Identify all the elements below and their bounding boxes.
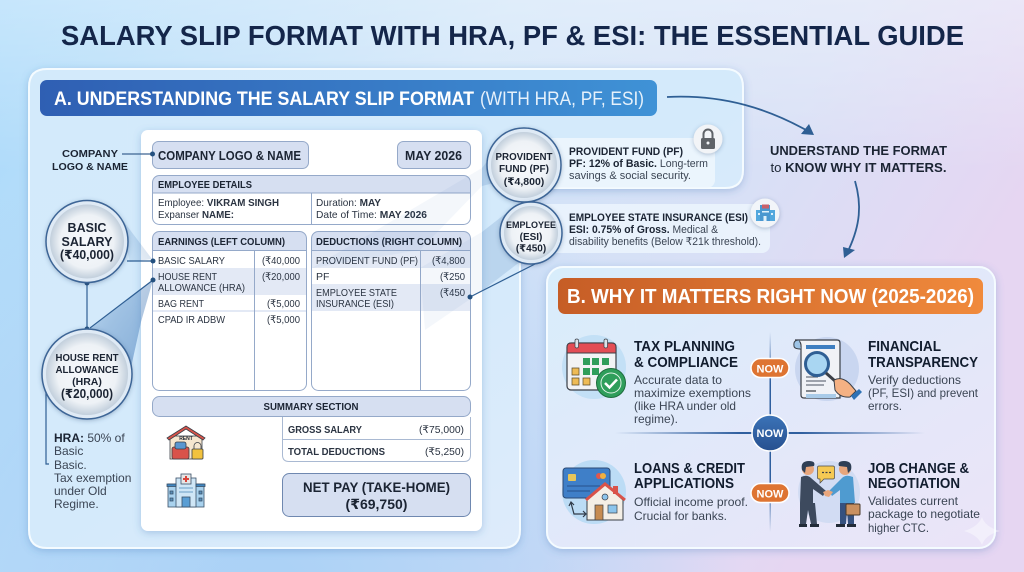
icon: credit card and house <box>562 460 626 524</box>
text: HRA note <box>54 431 131 511</box>
text: job change: Validates current <box>868 494 959 508</box>
callout: basic salary <box>46 200 128 282</box>
net pay box: (₹69,750) <box>346 496 407 512</box>
callout: basic salary: SALARY <box>62 235 113 249</box>
section A heading: (WITH HRA, PF, ESI) <box>480 89 644 110</box>
deductions table <box>312 232 470 390</box>
deductions table: (₹4,800 <box>432 255 465 267</box>
block: job change <box>798 460 980 535</box>
title: SALARY SLIP FORMAT WITH HRA, PF & ESI: THE ESSENTIAL GUIDE <box>61 20 964 51</box>
icon: lock <box>694 124 722 154</box>
company name box: COMPANY LOGO & NAME <box>158 148 301 163</box>
callout: basic salary: BASIC <box>68 221 106 235</box>
text: HRA note: Basic <box>54 444 83 458</box>
sparkle <box>964 517 1000 545</box>
label: company logo and name <box>52 148 155 173</box>
callout: employee ESI: (₹450) <box>516 244 546 254</box>
callout: house rent allowance <box>42 329 132 419</box>
callout: employee ESI: (ESI) <box>520 232 542 243</box>
deductions table: PF <box>316 271 329 283</box>
section B heading <box>558 278 983 314</box>
card: employee state insurance: EMPLOYEE STATE INSURANCE (ESI) <box>569 212 748 224</box>
callout: house rent allowance: (HRA) <box>72 376 102 388</box>
icon: ESI hospital <box>750 198 780 228</box>
employee details: Expanser NAME: <box>158 209 234 221</box>
icon: document with magnifier <box>794 337 862 401</box>
badge: now bottom: NOW <box>757 488 784 500</box>
block: financial transparency <box>794 337 979 413</box>
text: financial transparency: TRANSPARENCY <box>868 354 978 371</box>
divider lines <box>615 332 925 532</box>
summary section: (₹75,000) <box>419 424 464 436</box>
badge: now bottom <box>751 484 789 502</box>
earnings table: HOUSE RENT <box>158 271 217 283</box>
earnings table: (₹40,000 <box>262 255 300 267</box>
card: employee state insurance <box>535 204 770 253</box>
connectors from callouts <box>46 261 537 464</box>
summary section <box>152 396 470 462</box>
callout: house rent allowance: ALLOWANCE <box>56 364 118 376</box>
employee details: EMPLOYEE DETAILS <box>158 179 252 191</box>
net pay box <box>282 474 470 516</box>
text: tax planning: regime). <box>634 412 678 426</box>
callout: house rent allowance: HOUSE RENT <box>56 352 119 364</box>
text: loans and credit: Crucial for banks. <box>634 509 727 523</box>
deductions table: (₹450 <box>440 287 465 299</box>
text: understand the format: to KNOW WHY IT MATTERS. <box>770 160 946 175</box>
text: tax planning: TAX PLANNING <box>634 338 735 355</box>
section B heading: B. WHY IT MATTERS RIGHT NOW (2025-2026) <box>567 286 974 308</box>
company name box <box>152 142 308 168</box>
employee details: Employee: VIKRAM SINGH <box>158 197 279 209</box>
panel: section A background <box>29 69 743 548</box>
date box <box>398 142 470 168</box>
text: HRA note: Basic. <box>54 458 87 472</box>
deductions table: INSURANCE (ESI) <box>316 298 394 310</box>
text: loans and credit: APPLICATIONS <box>634 475 734 492</box>
left person <box>799 461 826 527</box>
summary section: (₹5,250) <box>425 446 464 458</box>
net pay box: NET PAY (TAKE-HOME) <box>303 479 450 495</box>
label: company logo and name: COMPANY <box>62 148 118 160</box>
callout: basic salary: (₹40,000) <box>60 248 114 262</box>
deductions table: (₹250 <box>440 271 465 283</box>
text: job change: JOB CHANGE & <box>868 460 969 477</box>
badge: now top <box>751 358 789 378</box>
earnings table: (₹5,000 <box>267 314 300 326</box>
callout: house rent allowance: (₹20,000) <box>61 387 113 401</box>
callout: employee ESI <box>500 202 562 264</box>
text: tax planning: (like HRA under old <box>634 399 736 413</box>
text: HRA note: under Old <box>54 484 107 498</box>
card: provident fund: PF: 12% of Basic. Long-term <box>569 158 708 170</box>
text: financial transparency <box>868 338 979 413</box>
badge: now top: NOW <box>757 364 784 376</box>
text: understand the format <box>770 143 947 175</box>
date box: MAY 2026 <box>405 148 462 163</box>
card: provident fund <box>530 138 715 188</box>
text: tax planning: Accurate data to <box>634 373 722 387</box>
earnings table: ALLOWANCE (HRA) <box>158 282 245 294</box>
deductions table: EMPLOYEE STATE <box>316 287 397 299</box>
section A heading <box>40 80 657 116</box>
earnings table: EARNINGS (LEFT COLUMN) <box>158 236 285 248</box>
text: tax planning: & COMPLIANCE <box>634 354 738 371</box>
text: financial transparency: FINANCIAL <box>868 338 941 355</box>
block: loans and credit <box>562 460 748 524</box>
summary section: GROSS SALARY <box>288 424 362 436</box>
text: job change: NEGOTIATION <box>868 475 960 492</box>
connector dots <box>84 258 472 332</box>
section A heading: A. UNDERSTANDING THE SALARY SLIP FORMAT <box>54 89 474 110</box>
icon: rent house: RENT <box>179 436 193 442</box>
text: HRA note: Regime. <box>54 497 99 511</box>
callout: employee ESI: EMPLOYEE <box>506 220 556 231</box>
panel: salary slip <box>141 130 482 531</box>
panel: section B background <box>547 267 995 548</box>
deductions table: DEDUCTIONS (RIGHT COLUMN) <box>316 236 462 248</box>
arrow: section A to message <box>667 97 814 135</box>
badge: now centre <box>752 415 788 451</box>
connector beams <box>90 155 525 372</box>
icon: calendar <box>562 335 626 399</box>
card: provident fund: PROVIDENT FUND (PF) <box>569 146 683 158</box>
text: job change: package to negotiate <box>868 507 980 521</box>
earnings table: BASIC SALARY <box>158 255 225 267</box>
earnings table <box>152 232 306 390</box>
text: loans and credit: LOANS & CREDIT <box>634 460 745 477</box>
card: employee state insurance: ESI: 0.75% of Gross. Medical & <box>569 224 719 236</box>
text: tax planning: maximize exemptions <box>634 386 751 400</box>
icon: rent house <box>167 426 205 459</box>
text: loans and credit: Official income proof. <box>634 495 748 509</box>
text: job change <box>868 460 980 535</box>
callout: provident fund <box>487 128 561 202</box>
employee details: Duration: MAY <box>316 197 381 209</box>
card: employee state insurance: disability benefits (Below ₹21k threshold). <box>569 236 761 248</box>
text: financial transparency: (PF, ESI) and prevent <box>868 386 979 400</box>
callout: provident fund: FUND (PF) <box>499 164 549 175</box>
label: company logo and name: LOGO & NAME <box>52 161 128 173</box>
earnings table: (₹5,000 <box>267 298 300 310</box>
earnings table: CPAD IR ADBW <box>158 314 225 326</box>
text: HRA note: Tax exemption <box>54 471 131 485</box>
employee details: Date of Time: MAY 2026 <box>316 209 427 221</box>
text: financial transparency: Verify deductions <box>868 373 961 387</box>
text: understand the format: UNDERSTAND THE FORMAT <box>770 143 947 158</box>
text: tax planning <box>634 338 751 426</box>
text: HRA note: HRA: 50% of <box>54 431 125 445</box>
block: tax planning <box>562 335 751 426</box>
summary section: TOTAL DEDUCTIONS <box>288 446 385 458</box>
text: loans and credit <box>634 460 748 523</box>
text: job change: higher CTC. <box>868 521 929 535</box>
right person <box>829 461 856 527</box>
arrow: message to section B <box>843 181 859 258</box>
callout: provident fund: (₹4,800) <box>504 176 544 188</box>
icon: hospital <box>167 474 205 507</box>
callout: provident fund: PROVIDENT <box>496 152 552 163</box>
icon: handshake <box>798 461 860 527</box>
earnings table: BAG RENT <box>158 298 204 310</box>
card: provident fund: savings & social security. <box>569 170 691 182</box>
text: financial transparency: errors. <box>868 399 902 413</box>
badge: now centre: NOW <box>757 428 784 440</box>
summary section: SUMMARY SECTION <box>264 401 358 413</box>
earnings table: (₹20,000 <box>262 271 300 283</box>
deductions table: PROVIDENT FUND (PF) <box>316 255 418 267</box>
employee details <box>152 176 470 224</box>
